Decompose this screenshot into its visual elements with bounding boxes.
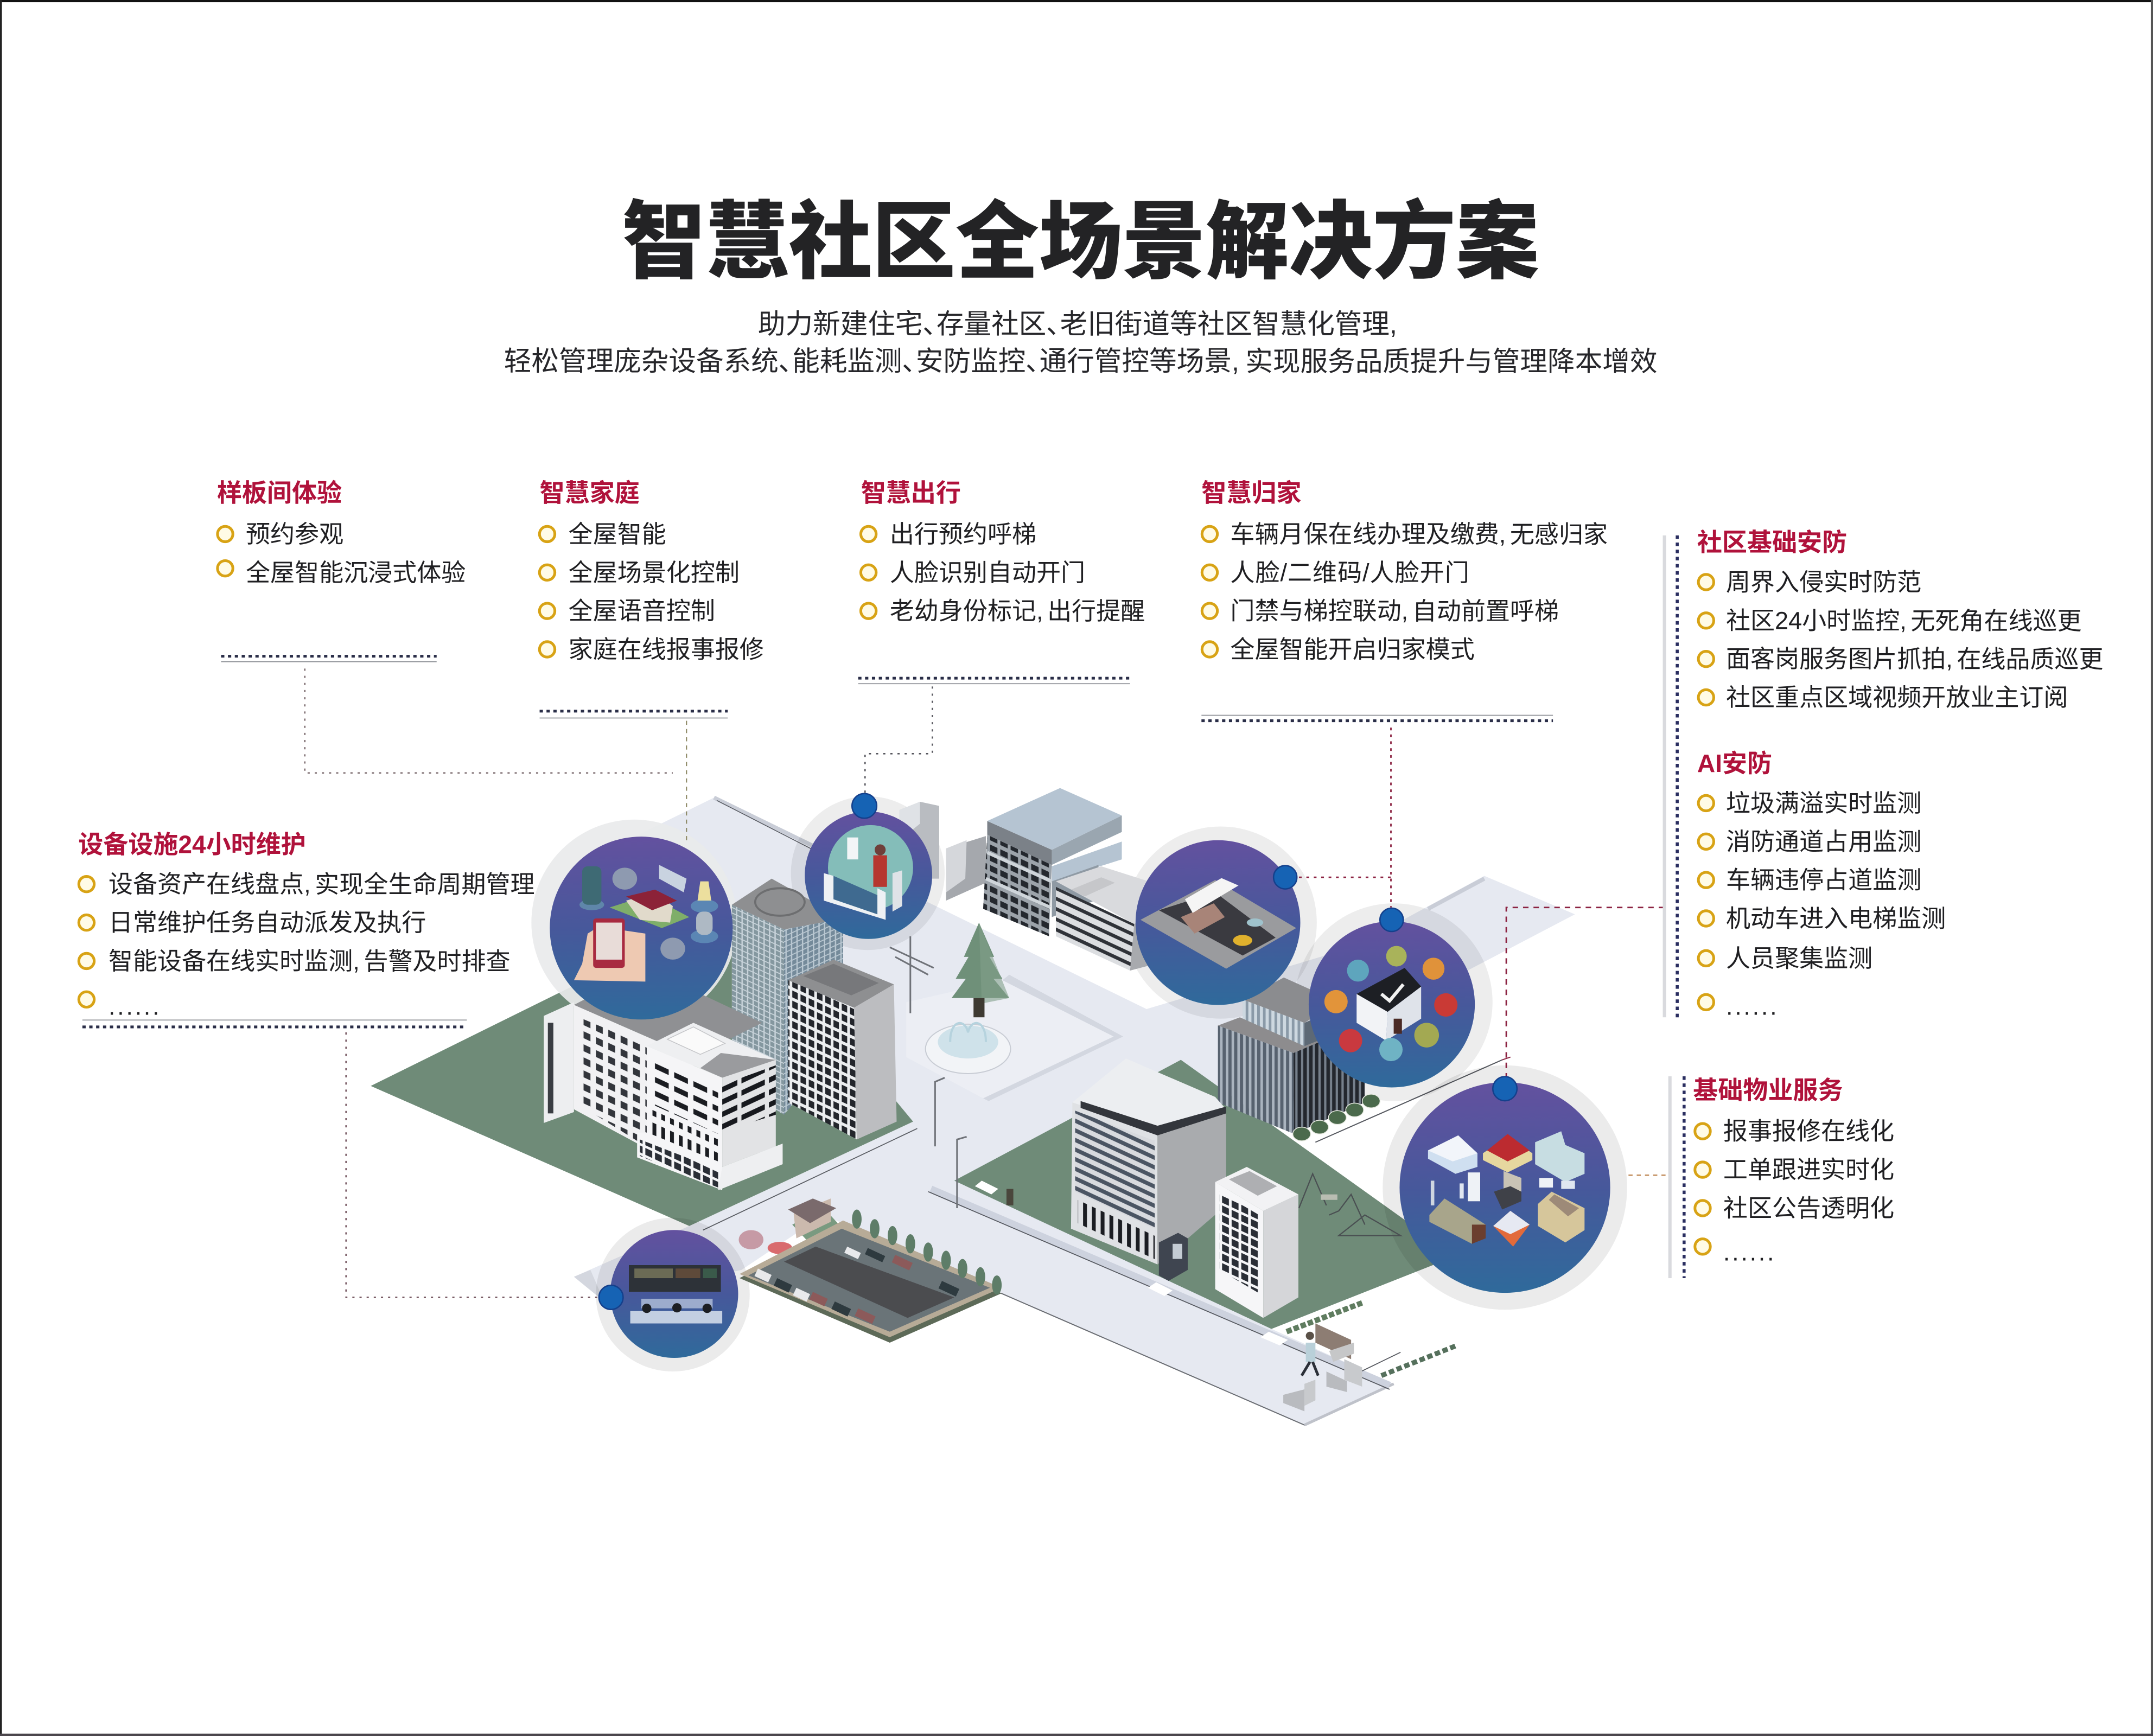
list: AI安防: ...... — [1726, 992, 1777, 1020]
panel: 基础物业服务 — [1668, 1076, 1894, 1278]
building: white office rear — [544, 968, 762, 1174]
list: AI安防: 人员聚集监测 — [1726, 944, 1872, 972]
list: ...... — [1723, 1238, 1774, 1266]
building: lower striped office — [1071, 1058, 1226, 1265]
list — [218, 520, 466, 586]
building: white office front — [637, 1023, 782, 1190]
heading: AI安防: AI安防 — [1697, 749, 1772, 777]
list: 全屋场景化控制 — [569, 559, 740, 586]
list: 社区基础安防: 社区24小时监控, 无死角在线巡更 — [1726, 607, 2082, 634]
building: striped glass block — [1218, 978, 1365, 1134]
list: 日常维护任务自动派发及执行 — [109, 909, 426, 936]
list — [1695, 1118, 1894, 1266]
person on lawn — [1007, 1189, 1014, 1205]
list — [1202, 520, 1608, 663]
playground swings — [1299, 1174, 1400, 1236]
building: glass tower — [732, 879, 843, 1115]
circle: smart home devices — [550, 837, 732, 1019]
circle: property services — [1399, 1082, 1610, 1293]
list — [539, 520, 764, 663]
list: 全屋智能沉浸式体验 — [246, 559, 466, 586]
list: AI安防: 消防通道占用监测 — [1726, 828, 1921, 856]
list: 报事报修在线化 — [1723, 1118, 1894, 1145]
road and plaza ground — [574, 797, 1575, 1425]
heading: 设备设施24小时维护 — [78, 830, 306, 858]
list: 智能设备在线实时监测, 告警及时排查 — [109, 947, 511, 975]
heading: 基础物业服务 — [1693, 1076, 1843, 1104]
list: 车辆月保在线办理及缴费, 无感归家 — [1230, 520, 1608, 548]
heading: 智慧出行 — [861, 479, 961, 507]
list: AI安防: 机动车进入电梯监测 — [1726, 905, 1946, 933]
panel: 样板间体验 — [217, 479, 466, 662]
parking lot — [740, 1209, 1002, 1343]
list: 人脸识别自动开门 — [890, 559, 1085, 586]
panel: 社区基础安防 and AI安防 — [1663, 528, 2104, 1020]
list — [79, 870, 535, 1020]
gatehouse — [788, 1198, 840, 1244]
parked gate items — [738, 1230, 792, 1254]
list: 社区基础安防: 周界入侵实时防范 — [1726, 569, 1921, 596]
circle: gate access — [805, 812, 932, 939]
list: AI安防: 垃圾满溢实时监测 — [1726, 789, 1921, 817]
building: dark window tower — [788, 960, 896, 1139]
list: 社区基础安防 — [1698, 569, 2104, 711]
list: ...... — [109, 992, 160, 1020]
panel: 智慧归家 — [1201, 479, 1608, 721]
list: 社区公告透明化 — [1723, 1194, 1894, 1222]
circle: smart home hub — [1309, 921, 1475, 1088]
list: 出行预约呼梯 — [890, 520, 1036, 548]
heading: 智慧归家 — [1201, 479, 1301, 507]
list: 人脸/二维码/人脸开门 — [1230, 559, 1469, 586]
connectors — [305, 668, 1670, 1297]
panel: 智慧家庭 — [539, 479, 764, 718]
list: 社区基础安防: 社区重点区域视频开放业主订阅 — [1726, 684, 2068, 711]
subtitle: 助力新建住宅、存量社区、老旧街道等社区智慧化管理, — [758, 309, 1397, 340]
kiosk — [1159, 1233, 1188, 1281]
panel: 设备设施24小时维护 — [78, 830, 535, 1027]
background towers — [900, 802, 986, 901]
building: layered blue roof block — [983, 788, 1122, 936]
street lamp and utility pole — [890, 936, 967, 1208]
list: 社区基础安防: 面客岗服务图片抓拍, 在线品质巡更 — [1726, 645, 2104, 673]
green lot: upper left — [371, 906, 917, 1230]
list: 全屋智能开启归家模式 — [1230, 636, 1475, 663]
list: 设备资产在线盘点, 实现全生命周期管理 — [109, 870, 535, 898]
sidewalk with bushes — [1315, 1057, 1511, 1142]
bushes — [1293, 1094, 1380, 1141]
building: white tower — [1215, 1167, 1298, 1318]
list: 老幼身份标记, 出行提醒 — [890, 597, 1145, 625]
fountain — [926, 1023, 1011, 1074]
tree — [952, 923, 1009, 1017]
list: 全屋智能 — [569, 520, 666, 548]
green lot: lower right — [928, 1060, 1455, 1389]
building: striped parking block — [1056, 866, 1192, 971]
list: AI安防 — [1698, 789, 1946, 1020]
heading: 样板间体验 — [217, 479, 342, 507]
circle: road and vehicle access — [1136, 840, 1300, 1005]
list: 工单跟进实时化 — [1723, 1156, 1894, 1184]
subtitle — [504, 309, 1657, 376]
list: 全屋语音控制 — [569, 597, 715, 625]
list: AI安防: 车辆违停占道监测 — [1726, 866, 1921, 894]
list: 家庭在线报事报修 — [569, 636, 764, 663]
subtitle: 轻松管理庞杂设备系统、能耗监测、安防监控、通行管控等场景, 实现服务品质提升与管理降本增效 — [504, 346, 1657, 376]
circle: device operations — [610, 1230, 738, 1358]
circle halos — [531, 796, 1627, 1371]
isometric community scene — [371, 788, 1627, 1425]
panel: 智慧出行 — [858, 479, 1145, 684]
bench, person, steps and shrubs — [1283, 1303, 1457, 1411]
heading: 社区基础安防: 社区基础安防 — [1697, 528, 1847, 557]
list: 预约参观 — [246, 520, 343, 548]
title: 智慧社区全场景解决方案 — [622, 173, 1539, 296]
list: 门禁与梯控联动, 自动前置呼梯 — [1230, 597, 1559, 625]
heading: 智慧家庭 — [540, 479, 640, 507]
anchor dots — [599, 794, 1517, 1310]
list — [861, 520, 1145, 625]
